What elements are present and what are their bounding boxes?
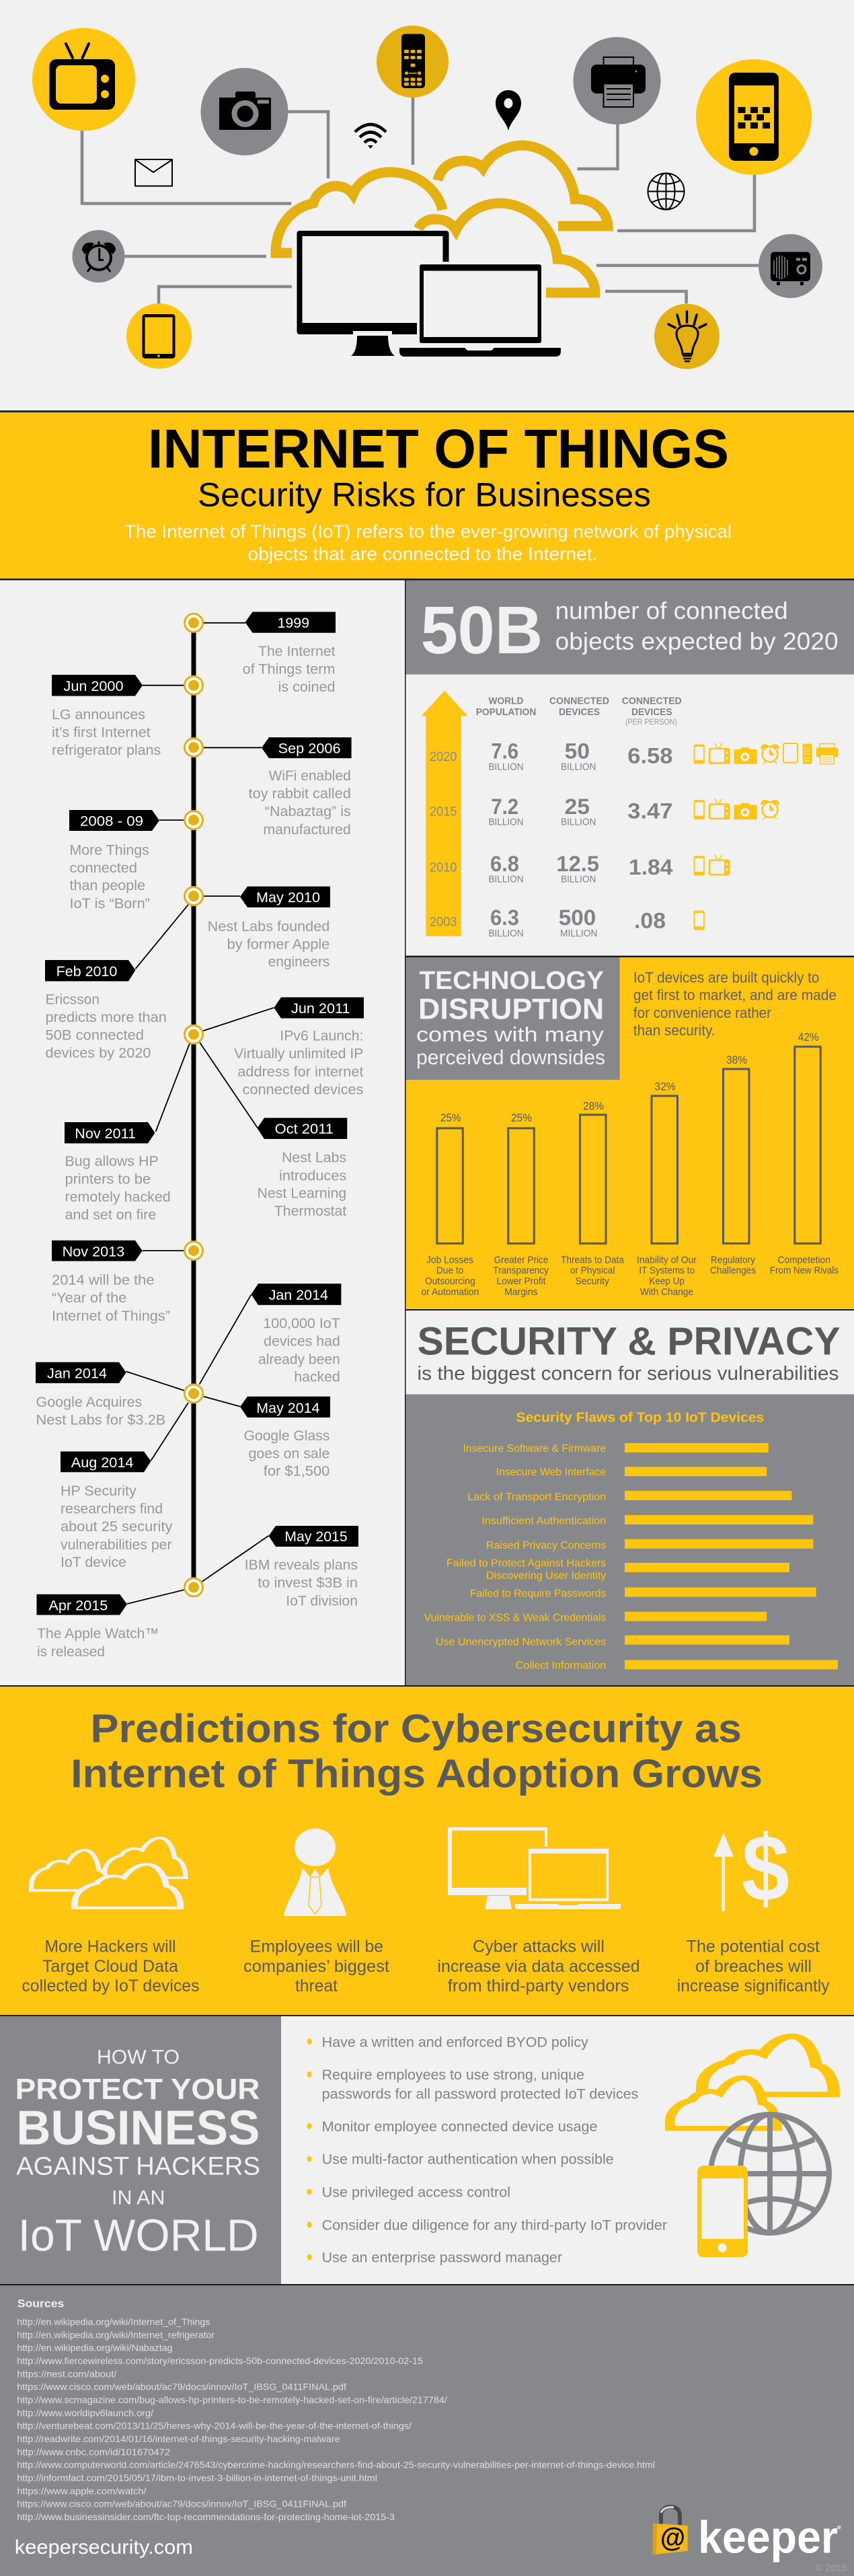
bar chart: Inability of Our [637, 1254, 697, 1265]
event: Feb 2010: Feb 2010 [56, 964, 117, 980]
icon: tablet [126, 303, 192, 369]
event: Nov 2013: 2014 will be the [52, 1273, 155, 1288]
row 2015 [488, 795, 779, 827]
subtitle: Security Risks for Businesses [198, 476, 651, 514]
row 2003 [488, 906, 705, 939]
panel: footer [0, 2285, 854, 2576]
event: 2008 - 09: More Things [70, 843, 149, 858]
event: Apr 2015: The Apple Watch™ [37, 1626, 159, 1642]
event: Jun 2011: IPv6 Launch: [280, 1029, 363, 1044]
row 2003: BILLION [488, 928, 523, 939]
chart panel: Failed to Require Passwords [470, 1588, 606, 1600]
icon: envelope [135, 159, 172, 186]
checklist: passwords for all password protected IoT devices [322, 2086, 638, 2102]
heading box: DISRUPTION [418, 993, 604, 1026]
chart panel: Failed to Protect Against Hackers [447, 1558, 606, 1570]
bar chart: Outsourcing [425, 1276, 475, 1287]
event: Feb 2010 [45, 960, 167, 1061]
event: Nov 2011 [65, 1122, 171, 1223]
timeline spine [191, 623, 196, 1587]
event: May 2015: IBM reveals plans [245, 1557, 358, 1573]
event: Sep 2006 [249, 737, 352, 838]
intro text: The Internet of Things (IoT) refers to the ever-growing network of physical [124, 521, 732, 542]
prediction captions: Target Cloud Data [42, 1957, 178, 1976]
event: May 2010: by former Apple [227, 936, 329, 953]
heading: PROTECT YOUR [15, 2073, 260, 2106]
sources list: http://www.worldipv6launch.org/ [17, 2407, 153, 2418]
sources list: http://venturebeat.com/2013/11/25/heres-why-2014-will-be-the-year-of-the-internet-of-things/ [17, 2421, 412, 2431]
years on arrow: 2015 [430, 805, 457, 819]
row 2015: BILLION [488, 817, 523, 827]
event: Aug 2014: HP Security [61, 1483, 137, 1499]
event: Jun 2000: it’s first Internet [52, 725, 151, 741]
event: Apr 2015: is released [37, 1644, 105, 1660]
bar chart: or Physical [570, 1265, 615, 1276]
event: Nov 2011: Bug allows HP [65, 1154, 159, 1169]
row 2020: BILLION [561, 761, 596, 772]
icon: clouds [31, 1838, 186, 1908]
bar chart: Regulatory [711, 1254, 755, 1265]
years on arrow: 2003 [430, 915, 457, 929]
event: Apr 2015: Apr 2015 [48, 1598, 108, 1613]
bar chart: With Change [640, 1286, 693, 1298]
panel: 50B connected objects [406, 580, 854, 939]
description [633, 969, 837, 1039]
event: 2008 - 09: connected [70, 860, 137, 876]
event: Jan 2014 right [251, 1284, 341, 1385]
icon: remote control [377, 26, 449, 98]
title: INTERNET OF THINGS [148, 418, 729, 480]
description: than security. [633, 1022, 715, 1039]
bar chart: Threats to Data [561, 1254, 624, 1265]
panel: security and privacy [406, 1320, 854, 1685]
event: May 2014: May 2014 [256, 1401, 320, 1416]
event: 1999: The Internet [258, 644, 336, 659]
event: Feb 2010: devices by 2020 [46, 1045, 151, 1061]
sources list [17, 2316, 655, 2522]
bar chart: Transparency [493, 1265, 549, 1276]
row 2020: BILLION [488, 761, 523, 772]
event: Oct 2011 [257, 1118, 347, 1219]
bar chart: Job Losses [426, 1254, 473, 1265]
description: for convenience rather [633, 1004, 771, 1021]
event: Aug 2014: Aug 2014 [71, 1455, 134, 1471]
row 2010: 6.8 [490, 852, 519, 876]
prediction captions: threat [295, 1977, 338, 1995]
row 2010: 12.5 [556, 852, 599, 876]
icon: alarm clock [73, 230, 125, 283]
bar chart [421, 1031, 839, 1298]
icon: light bulb [654, 304, 720, 369]
event: Aug 2014 [61, 1452, 173, 1570]
column headers: DEVICES [631, 706, 672, 718]
years on arrow: 2010 [430, 860, 457, 875]
event: Nov 2011: printers to be [65, 1171, 151, 1187]
prediction captions: The potential cost [687, 1938, 820, 1956]
panel: timeline [36, 612, 364, 1660]
icon: employee [284, 1829, 346, 1916]
column headers: CONNECTED [622, 696, 682, 706]
event: 1999 [243, 612, 336, 695]
event: Jun 2000: LG announces [52, 707, 145, 723]
row 2003: MILLION [560, 928, 597, 939]
icon: desktop monitor [297, 231, 449, 356]
sources list: https://www.apple.com/watch/ [17, 2485, 147, 2496]
event: Sep 2006: Sep 2006 [278, 741, 341, 757]
sources heading: Sources [17, 2297, 64, 2310]
icon: laptop [399, 262, 561, 357]
event: May 2014: goes on sale [249, 1446, 329, 1461]
column headers: (PER PERSON) [625, 717, 677, 727]
icon: smartphone [696, 59, 812, 175]
bar chart: Security [576, 1276, 609, 1287]
bar chart: or Automation [421, 1286, 479, 1298]
bar chart: 32% [655, 1080, 675, 1093]
sources list: http://en.wikipedia.org/wiki/Internet_refrigerator [17, 2329, 215, 2340]
row 2020: 6.58 [627, 744, 672, 768]
event: Jun 2011: connected devices [243, 1082, 363, 1097]
heading: BUSINESS [16, 2101, 260, 2155]
intro text [124, 521, 732, 564]
chart panel: Collect Information [516, 1660, 606, 1671]
icon: television [32, 28, 135, 131]
prediction captions: companies’ biggest [243, 1957, 389, 1976]
event: May 2010: engineers [268, 954, 329, 970]
chart panel: Insecure Web Interface [496, 1467, 606, 1478]
icon: radio [759, 234, 822, 298]
event: 1999: of Things term [243, 662, 335, 677]
clouds [276, 145, 608, 293]
bar chart: Keep Up [649, 1276, 685, 1287]
heading box: TECHNOLOGY [420, 967, 604, 995]
event: Aug 2014: IoT device [61, 1555, 126, 1570]
prediction captions: increase via data accessed [437, 1957, 640, 1976]
bar chart: From New Rivals [770, 1265, 839, 1276]
row 2010: BILLION [488, 874, 523, 885]
event: Feb 2010: 50B connected [46, 1028, 144, 1043]
event: Feb 2010: Ericsson [46, 992, 100, 1008]
prediction captions: Cyber attacks will [473, 1938, 605, 1956]
event: May 2014: for $1,500 [264, 1464, 329, 1479]
prediction captions: of breaches will [695, 1957, 812, 1976]
checklist: Use multi-factor authentication when possible [322, 2152, 614, 2168]
event: Nov 2013: Internet of Things” [52, 1309, 170, 1324]
row 2020 [488, 739, 839, 772]
event: Oct 2011: Oct 2011 [275, 1121, 334, 1137]
column headers [476, 696, 682, 727]
sources list: http://en.wikipedia.org/wiki/Nabaztag [17, 2343, 173, 2353]
row 2003: 500 [559, 906, 596, 930]
years on arrow [430, 750, 457, 929]
heading: IoT WORLD [18, 2211, 259, 2261]
chart panel: Use Unencrypted Network Services [436, 1636, 606, 1648]
event: Nov 2013: Nov 2013 [63, 1244, 124, 1259]
icon: clouds, globe and phone [670, 2036, 834, 2257]
event: Jun 2011 [234, 997, 364, 1097]
heading box [406, 957, 620, 1080]
event: Apr 2015 [36, 1594, 159, 1660]
logo: keeper padlock: @ [660, 2523, 685, 2552]
sources list: http://www.cnbc.com/id/101670472 [17, 2446, 170, 2457]
heading: Predictions for Cybersecurity as [90, 1706, 742, 1751]
bar chart: Lower Profit [496, 1276, 546, 1287]
intro text: objects that are connected to the Internet. [247, 544, 597, 564]
event: Aug 2014: researchers find [61, 1502, 163, 1517]
panel: how to protect your business [0, 2016, 834, 2285]
event: May 2015: to invest $3B in [258, 1575, 358, 1590]
event: Jun 2011: Jun 2011 [291, 1001, 350, 1017]
event: Jun 2000 [52, 675, 161, 758]
years on arrow: 2020 [430, 750, 457, 764]
event: May 2015: IoT division [286, 1593, 358, 1609]
icon: globe [648, 174, 685, 210]
sources list: http://www.businessinsider.com/ftc-top-recommendations-for-protecting-home-iot-2015-3 [17, 2511, 395, 2522]
column headers: POPULATION [476, 706, 536, 718]
event: Oct 2011: Nest Labs [282, 1150, 346, 1165]
prediction captions: Employees will be [250, 1938, 383, 1956]
event: Jun 2000: refrigerator plans [52, 743, 161, 758]
connector lines [126, 623, 274, 1604]
event: Oct 2011: Nest Learning [257, 1186, 346, 1202]
header text [555, 597, 839, 655]
event: Oct 2011: introduces [279, 1168, 346, 1183]
arrow [421, 690, 468, 936]
description: IoT devices are built quickly to [633, 969, 819, 986]
prediction captions: from third-party vendors [448, 1977, 629, 1995]
event: Nov 2011: remotely hacked [65, 1189, 171, 1205]
chart panel: Raised Privacy Concerns [486, 1540, 606, 1551]
checklist: Monitor employee connected device usage [322, 2119, 597, 2135]
icon: wifi [355, 124, 386, 149]
heading: IN AN [112, 2187, 165, 2209]
event: Nov 2013: “Year of the [52, 1290, 126, 1306]
event: Sep 2006: toy rabbit called [249, 786, 351, 802]
checklist: Use an enterprise password manager [322, 2250, 562, 2266]
sources list: https://nest.com/about/ [17, 2368, 117, 2379]
heading box: perceived downsides [416, 1045, 605, 1069]
sources list: https://www.cisco.com/web/about/ac79/docs/innov/IoT_IBSG_0411FINAL.pdf [17, 2499, 346, 2509]
sources list: http://www.computerworld.com/article/2476543/cybercrime-hacking/researchers-find-about-25-security-vulnerabilities-per-internet-of-things-device.html [17, 2460, 655, 2470]
event: Jun 2000: Jun 2000 [63, 679, 124, 694]
event: Jan 2014 left: Jan 2014 [47, 1366, 107, 1381]
heading: AGAINST HACKERS [16, 2152, 260, 2180]
event: May 2015: May 2015 [284, 1529, 348, 1545]
event: 2008 - 09: IoT is “Born” [70, 896, 150, 912]
panel: title banner [0, 412, 854, 579]
bar chart: Competetion [777, 1254, 830, 1265]
chart panel: Security Flaws of Top 10 IoT Devices [516, 1411, 764, 1426]
logo: keeper wordmark: keeper [698, 2511, 838, 2563]
event: 1999: 1999 [277, 616, 309, 631]
prediction captions: collected by IoT devices [22, 1977, 200, 1995]
sources list: https://www.cisco.com/web/about/ac79/docs/innov/IoT_IBSG_0411FINAL.pdf [17, 2382, 346, 2392]
heading: HOW TO [97, 2046, 180, 2068]
event: Jan 2014 left: Google Acquires [36, 1395, 142, 1410]
big number: 50B [421, 593, 543, 668]
checklist: Require employees to use strong, unique [322, 2067, 584, 2083]
sources list: http://readwrite.com/2014/01/16/internet-of-things-security-hacking-malware [17, 2433, 340, 2444]
event: Jan 2014 right: 100,000 IoT [263, 1316, 340, 1331]
event: Jun 2011: Virtually unlimited IP [234, 1046, 363, 1062]
event: Jun 2011: address for internet [237, 1064, 364, 1080]
header text: objects expected by 2020 [555, 627, 839, 655]
panel: predictions [0, 1687, 854, 2015]
icon: printer [573, 37, 660, 124]
event: May 2010 [208, 887, 330, 970]
event: 2008 - 09: 2008 - 09 [80, 813, 143, 829]
chart panel: Insecure Software & Firmware [463, 1443, 606, 1455]
row 2015: 7.2 [491, 795, 518, 819]
event: Nov 2013 [52, 1241, 170, 1324]
row 2015: BILLION [561, 817, 596, 827]
description: get first to market, and are made [633, 986, 837, 1004]
website: keepersecurity.com [15, 2536, 193, 2559]
icon: map pin [496, 90, 521, 131]
bar chart: Greater Price [494, 1254, 548, 1265]
row 2020: 7.6 [491, 739, 518, 763]
chart panel [406, 1394, 854, 1685]
heading: Internet of Things Adoption Grows [71, 1752, 763, 1796]
header text: number of connected [555, 597, 788, 624]
row 2020: 50 [565, 739, 590, 763]
row 2003: .08 [634, 908, 666, 932]
event: 1999: is coined [278, 679, 335, 695]
event: Sep 2006: “Nabaztag” is [265, 804, 351, 819]
event: Jan 2014 right: hacked [294, 1369, 340, 1385]
chart panel: Insufficient Authentication [481, 1516, 606, 1527]
event: Jan 2014 left [36, 1362, 165, 1428]
event: Sep 2006: manufactured [263, 822, 351, 838]
checklist: Have a written and enforced BYOD policy [322, 2035, 588, 2051]
event: 2008 - 09: than people [70, 878, 145, 893]
heading box: comes with many [416, 1023, 605, 1046]
event: Sep 2006: WiFi enabled [269, 768, 351, 784]
chart panel: Discovering User Identity [486, 1570, 606, 1582]
icon: rising cost [713, 1815, 789, 1921]
row 2015: 3.47 [627, 799, 672, 823]
timeline nodes [184, 614, 203, 1596]
prediction captions: More Hackers will [44, 1938, 176, 1956]
event: Feb 2010: predicts more than [46, 1010, 167, 1025]
sources list: http://www.fiercewireless.com/story/ericsson-predicts-50b-connected-devices-2020/2010-02-15 [17, 2355, 423, 2366]
checklist: Consider due diligence for any third-party IoT provider [322, 2217, 667, 2233]
row 2010 [488, 852, 730, 885]
sources list: http://en.wikipedia.org/wiki/Internet_of_Things [17, 2316, 210, 2327]
icon: rising cost: $ [742, 1815, 789, 1921]
bar chart: Margins [504, 1286, 538, 1298]
event: Nov 2011: and set on fire [65, 1207, 156, 1223]
hero illustration: connected devices and clouds [32, 26, 822, 369]
row 2015: 25 [565, 795, 590, 819]
event: May 2014: Google Glass [244, 1428, 329, 1444]
row 2003: 6.3 [490, 906, 519, 930]
connector lines [82, 98, 759, 303]
icon: computers [448, 1827, 621, 1909]
event: May 2010: Nest Labs founded [208, 919, 329, 934]
prediction captions [22, 1938, 830, 1995]
subheading: is the biggest concern for serious vulnerabilities [417, 1363, 839, 1385]
bar chart: 25% [511, 1111, 532, 1124]
sources list: http://informfact.com/2015/05/17/ibm-to-invest-3-billion-in-internet-of-things-unit.html [17, 2472, 377, 2483]
chart panel: Vulnerable to XSS & Weak Credentials [424, 1613, 606, 1624]
event: Nov 2011: Nov 2011 [75, 1126, 136, 1142]
sources list: http://www.scmagazine.com/bug-allows-hp-printers-to-be-remotely-hacked-set-on-fire/article/217784/ [17, 2394, 447, 2405]
checklist: Use privileged access control [322, 2185, 510, 2201]
heading [15, 2046, 260, 2261]
panel: technology disruption [406, 957, 854, 1309]
event: Jan 2014 left: Nest Labs for $3.2B [36, 1413, 165, 1428]
event: Jan 2014 right: Jan 2014 [269, 1288, 328, 1303]
event: May 2014 [240, 1397, 330, 1479]
bar chart: Challenges [710, 1265, 756, 1276]
column headers: WORLD [488, 696, 524, 706]
row 2010: BILLION [561, 874, 596, 885]
bar chart: 28% [583, 1100, 604, 1113]
column headers: CONNECTED [549, 696, 609, 706]
bar chart: 42% [798, 1031, 819, 1043]
divider [0, 410, 854, 412]
event: Jan 2014 right: devices had [264, 1334, 340, 1350]
bar chart: Due to [436, 1265, 463, 1276]
event: Aug 2014: about 25 security [61, 1519, 173, 1535]
copyright: © 2015 [816, 2563, 847, 2573]
event: May 2015 [245, 1526, 358, 1609]
event: May 2010: May 2010 [256, 890, 320, 906]
bar chart: IT Systems to [639, 1265, 695, 1276]
row 2010: 1.84 [629, 855, 673, 879]
heading: SECURITY & PRIVACY [417, 1320, 841, 1364]
column headers: DEVICES [559, 706, 600, 718]
chart panel: Lack of Transport Encryption [467, 1492, 606, 1503]
icon: camera [200, 68, 288, 155]
bar chart: 25% [440, 1111, 461, 1124]
event: 2008 - 09 [69, 810, 159, 912]
event: Aug 2014: vulnerabilities per [61, 1537, 172, 1553]
event: Oct 2011: Thermostat [274, 1204, 346, 1219]
bar chart: 38% [726, 1054, 747, 1066]
header band [406, 580, 854, 674]
heading [71, 1706, 763, 1796]
prediction captions: increase significantly [677, 1977, 830, 1995]
event: Jan 2014 right: already been [258, 1352, 340, 1367]
logo: keeper padlock [653, 2507, 688, 2554]
checklist [307, 2035, 667, 2266]
